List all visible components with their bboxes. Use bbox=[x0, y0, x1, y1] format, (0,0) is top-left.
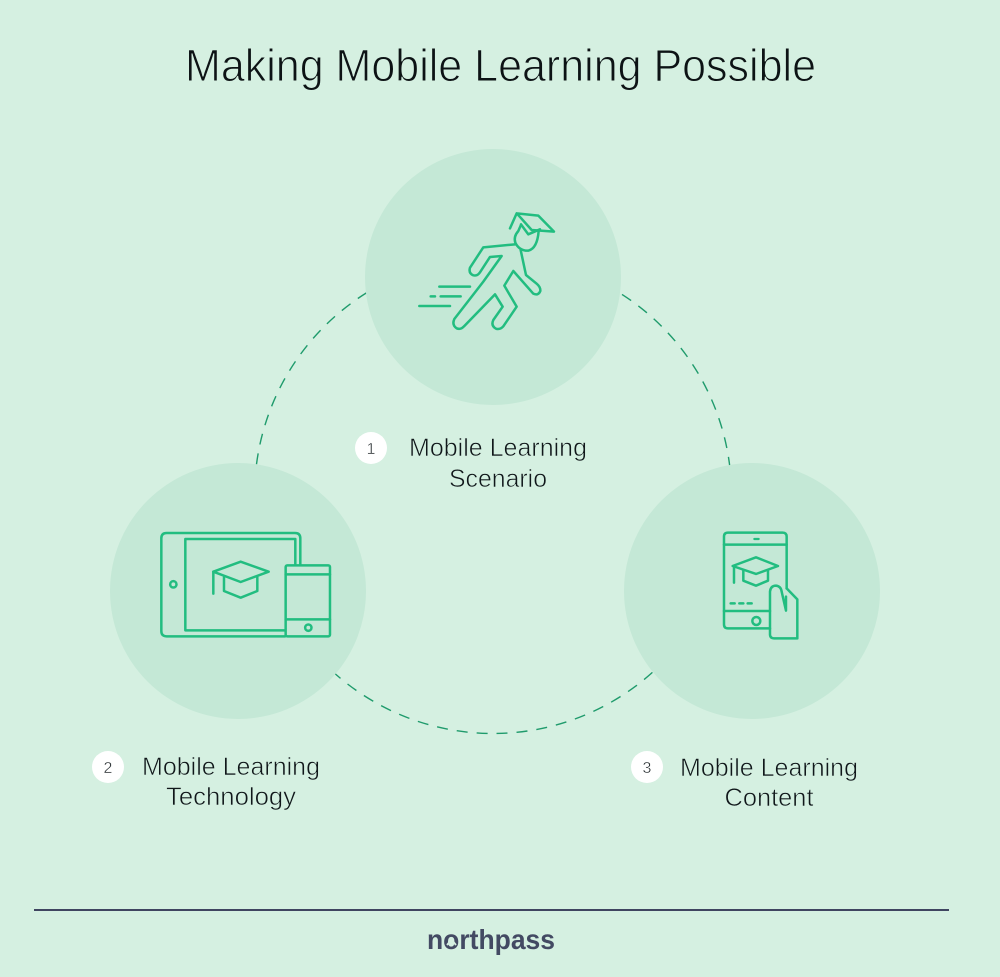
icon: tablet and phone bbox=[161, 533, 330, 636]
icon: phone in hand bbox=[724, 533, 797, 638]
dashed connector ring bbox=[254, 256, 732, 734]
label: Mobile Learning Technology bbox=[142, 753, 320, 811]
number badge 2 bbox=[92, 751, 124, 783]
number badge 1: 1 bbox=[367, 441, 376, 458]
label: Mobile Learning Scenario: Mobile Learning bbox=[409, 434, 587, 462]
circle: scenario bbox=[365, 149, 621, 405]
label: Mobile Learning Technology: Technology bbox=[166, 783, 297, 811]
circle: technology bbox=[110, 463, 366, 719]
number badge 2: 2 bbox=[104, 760, 113, 777]
panel: content bbox=[624, 463, 880, 812]
number badge 3 bbox=[631, 751, 663, 783]
label: Mobile Learning Scenario bbox=[409, 434, 587, 493]
number badge 3: 3 bbox=[643, 760, 652, 777]
label: Mobile Learning Content bbox=[680, 754, 858, 812]
footer divider bbox=[34, 909, 949, 911]
label: Mobile Learning Content: Mobile Learning bbox=[680, 754, 858, 782]
panel: scenario bbox=[355, 149, 621, 493]
logo: northpass: northpass bbox=[427, 924, 555, 955]
number badge 1 bbox=[355, 432, 387, 464]
title: Making Mobile Learning Possible bbox=[185, 40, 816, 91]
panel: technology bbox=[92, 463, 366, 811]
label: Mobile Learning Technology: Mobile Learning bbox=[142, 753, 320, 781]
icon: running graduate bbox=[419, 213, 554, 329]
circle: content bbox=[624, 463, 880, 719]
label: Mobile Learning Scenario: Scenario bbox=[449, 465, 547, 493]
label: Mobile Learning Content: Content bbox=[724, 784, 814, 812]
